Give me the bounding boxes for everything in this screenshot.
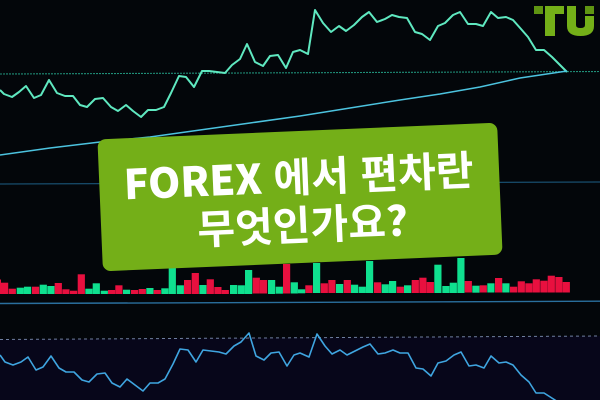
icon: TU logo <box>534 6 594 36</box>
oscillator background <box>0 336 600 400</box>
dashed oscillator level <box>0 336 600 340</box>
blue horizontal level line <box>0 182 600 184</box>
panel: green title card <box>97 123 503 271</box>
teal dashed reference line <box>0 72 600 74</box>
title: 무엇인가요? <box>196 188 409 256</box>
oscillator line <box>0 333 562 400</box>
red volume bars <box>0 264 570 294</box>
title: FOREX 에서 편차란 <box>123 137 475 211</box>
green volume bars <box>17 258 509 294</box>
blue divider line <box>0 301 600 304</box>
title <box>123 137 475 256</box>
price line <box>0 10 567 117</box>
moving average line <box>0 71 567 155</box>
volume bars <box>0 258 570 294</box>
